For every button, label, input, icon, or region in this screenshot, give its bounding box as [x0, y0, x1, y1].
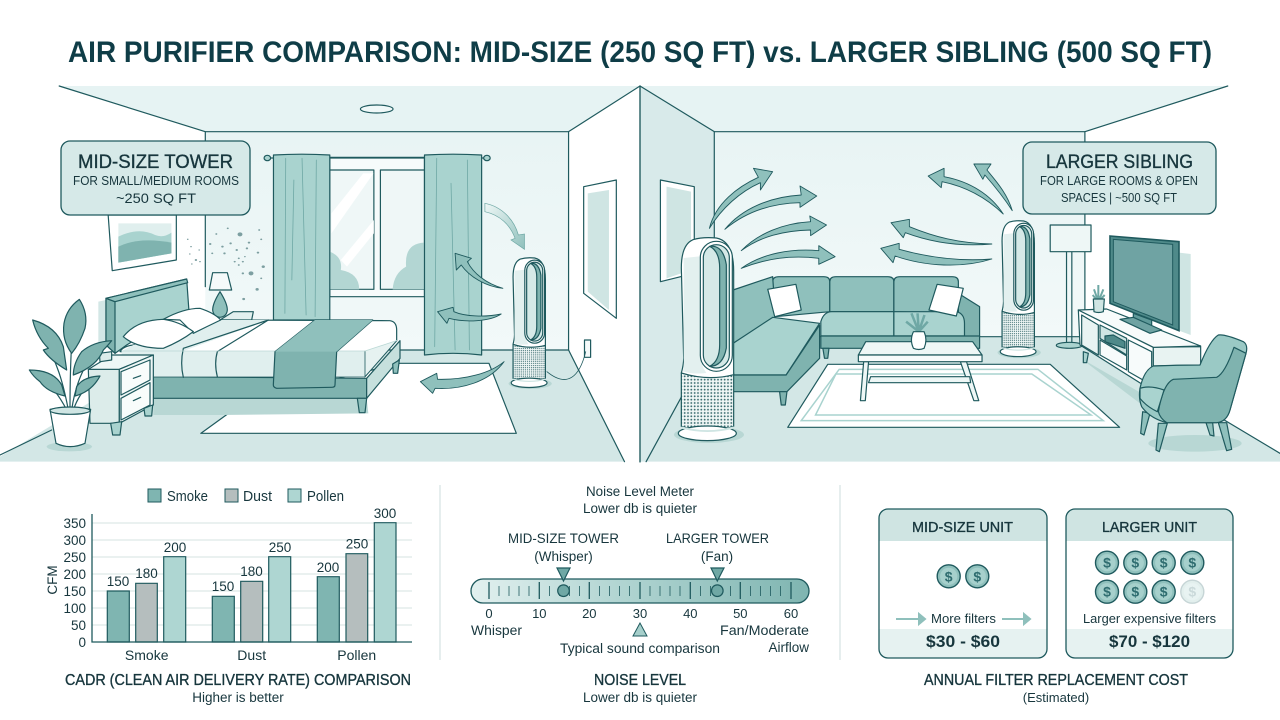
meter sub-caption: Lower db is quieter: [583, 501, 697, 516]
panel: CADR chart: [45, 489, 412, 705]
mid-size marker label: MID-SIZE TOWER: [508, 530, 619, 546]
meter scale: 30: [633, 606, 647, 621]
y axis labels: [63, 516, 86, 650]
mid-size marker label: [508, 530, 619, 564]
y axis labels: 100: [63, 601, 86, 616]
panel: living room scene: [640, 86, 1280, 462]
fan label: [720, 623, 809, 655]
wall picture: [660, 180, 694, 282]
card: larger unit: [1066, 509, 1233, 658]
wall outlet and cord: [547, 340, 591, 379]
bars: [107, 523, 396, 642]
chart subheading: Higher is better: [192, 690, 284, 705]
icon: larger purifier near sofa: [998, 221, 1041, 358]
larger marker label: (Fan): [701, 549, 733, 564]
bar values: 300: [374, 506, 396, 521]
tv console: [1078, 253, 1201, 385]
floor lamp: [1050, 225, 1091, 348]
meter scale: 10: [532, 606, 547, 621]
category labels: Smoke: [125, 647, 169, 663]
chart legend: Dust: [243, 489, 272, 505]
meter bar: [471, 579, 809, 603]
bar values: [107, 506, 396, 594]
chart legend: [148, 489, 344, 505]
wall picture: [108, 215, 176, 271]
airflow arrows: [420, 203, 524, 393]
callout: larger sibling: LARGER SIBLING: [1046, 152, 1193, 173]
floor line: [0, 430, 52, 455]
wall picture right: [584, 180, 616, 318]
sofa: [733, 277, 980, 405]
y axis labels: 200: [63, 567, 86, 582]
television: [1110, 236, 1179, 333]
meter scale: 20: [582, 606, 597, 621]
meter scale: 50: [733, 606, 748, 621]
mid-size marker label: (Whisper): [534, 549, 593, 564]
callout: larger sibling: FOR LARGE ROOMS & OPEN: [1040, 174, 1198, 188]
callout: larger sibling: SPACES | ~500 SQ FT: [1061, 191, 1177, 205]
fan label: Fan/Moderate: [720, 623, 809, 638]
rug: [201, 363, 516, 433]
y axis labels: 300: [63, 533, 86, 548]
panel: noise meter: [471, 484, 809, 705]
callout: mid-size tower: FOR SMALL/MEDIUM ROOMS: [73, 174, 239, 188]
meter scale: 0: [485, 606, 493, 621]
mid-size marker: [557, 568, 570, 596]
category labels: Pollen: [337, 647, 376, 663]
y axis labels: 250: [63, 550, 86, 565]
chart legend: Smoke: [167, 489, 208, 505]
callout: larger sibling: [1023, 142, 1216, 214]
centre wall edge: [639, 86, 641, 462]
y axis labels: 150: [63, 584, 86, 599]
y axis labels: 50: [71, 618, 86, 633]
card: mid-size unit: $30 - $60: [926, 632, 1000, 651]
bar values: 150: [107, 574, 129, 589]
y axis title: CFM: [45, 565, 60, 595]
y axis labels: 350: [63, 516, 86, 531]
category labels: Dust: [237, 647, 266, 663]
fan label: Airflow: [768, 640, 809, 655]
card: larger unit: Larger expensive filters: [1083, 612, 1216, 626]
chart legend: Pollen: [307, 489, 344, 505]
callout: mid-size tower: ~250 SQ FT: [116, 190, 196, 206]
lamp: [209, 273, 253, 320]
noise subheading: Lower db is quieter: [583, 690, 697, 705]
card: larger unit: $70 - $120: [1109, 632, 1190, 651]
noise heading: NOISE LEVEL: [594, 672, 686, 689]
typical marker: [633, 623, 647, 636]
bar values: 150: [212, 579, 234, 594]
title: AIR PURIFIER COMPARISON: MID-SIZE (250 SQ FT) vs. LARGER SIBLING (500 SQ FT): [68, 36, 1212, 69]
category labels: [125, 647, 376, 663]
meter caption: Noise Level Meter: [586, 484, 694, 499]
nightstand: [88, 352, 153, 435]
bedroom furniture: [0, 273, 400, 455]
left curtain: [264, 154, 490, 320]
larger marker: [711, 568, 724, 596]
bar values: 250: [269, 540, 291, 555]
rug: [788, 364, 1120, 427]
bar values: 200: [164, 540, 186, 555]
card: mid-size unit: More filters: [931, 612, 996, 626]
card: mid-size unit: [879, 509, 1047, 658]
callout: mid-size tower: [61, 141, 250, 215]
y axis labels: 0: [78, 635, 86, 650]
cost heading: ANNUAL FILTER REPLACEMENT COST: [924, 672, 1188, 689]
bed: [98, 279, 400, 415]
potted plant: [29, 299, 112, 451]
vase with plant: [906, 313, 928, 349]
icon: larger purifier foreground: [674, 238, 744, 443]
card: mid-size unit: MID-SIZE UNIT: [912, 519, 1013, 536]
meter scale: 40: [683, 606, 698, 621]
small plant: [1093, 285, 1105, 312]
dust particles: [187, 227, 265, 300]
living room furniture right: [1078, 236, 1247, 452]
meter scale: 60: [784, 606, 798, 621]
bar values: 180: [240, 564, 263, 579]
floor shadows: [1085, 362, 1143, 403]
larger marker label: [666, 530, 769, 564]
chart axes: [92, 514, 412, 642]
whisper label: Whisper: [471, 623, 523, 638]
window: [330, 157, 424, 297]
bar values: 180: [135, 566, 158, 581]
bar values: 250: [346, 536, 368, 552]
card: larger unit: LARGER UNIT: [1102, 519, 1197, 536]
panel: filter cost: [879, 509, 1233, 705]
chart heading: CADR (CLEAN AIR DELIVERY RATE) COMPARISON: [65, 672, 411, 689]
larger marker label: LARGER TOWER: [666, 530, 769, 546]
right curtain: [424, 154, 482, 355]
cost subheading: (Estimated): [1023, 690, 1089, 705]
coffee table: [858, 342, 982, 401]
armchair: [1139, 335, 1247, 452]
typical label: Typical sound comparison: [560, 641, 720, 656]
airflow arrows: [709, 164, 1012, 268]
callout: mid-size tower: MID-SIZE TOWER: [78, 152, 233, 173]
bar values: 200: [317, 560, 339, 575]
meter scale: [485, 606, 798, 621]
icon: mid-size purifier: [509, 258, 552, 389]
panel: bedroom scene: [0, 86, 640, 462]
